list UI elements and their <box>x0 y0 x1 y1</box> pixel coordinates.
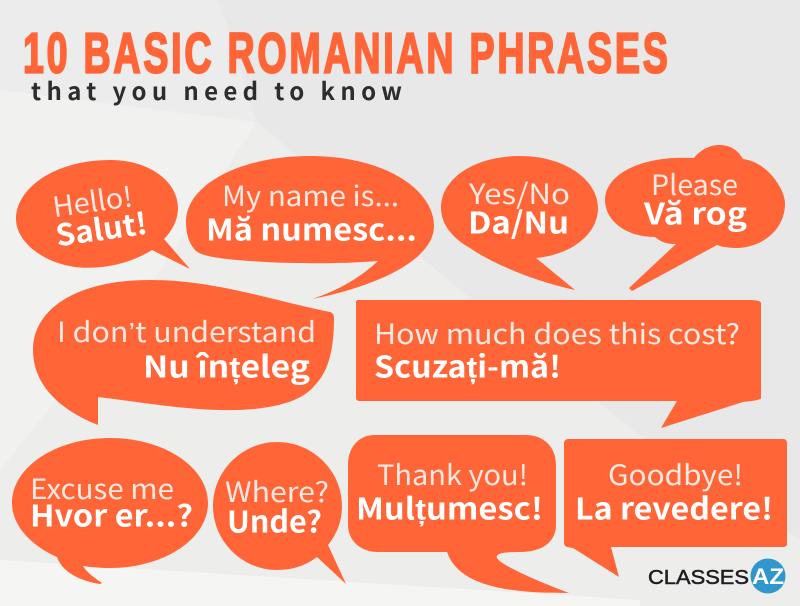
bubble: My name is <box>186 156 434 299</box>
bubble: Where: Unde? <box>227 498 322 542</box>
bubble: Where: Where? <box>225 471 329 511</box>
bubble: Yes/No: Da/Nu <box>468 198 569 242</box>
bubble: Thank you <box>348 435 569 593</box>
bubble: Goodbye <box>564 439 787 577</box>
bubble: Hello: Hello! <box>50 175 135 226</box>
bubble: Excuse me: Excuse me <box>30 468 174 508</box>
bubble: My name is: Mă numesc... <box>206 206 417 250</box>
bubble: I don't understand <box>33 280 334 425</box>
title: 10 BASIC ROMANIAN PHRASES <box>23 22 668 85</box>
bubble: How much does this cost: Scuzați-mă! <box>374 342 561 386</box>
bubble: I don't understand: I don’t understand <box>57 311 316 351</box>
subtitle: that you need to know <box>31 72 402 107</box>
bubble: Thank you: Thank you! <box>377 454 528 494</box>
bubble: Where <box>213 442 346 584</box>
logo: Classes AZ: AZ <box>752 564 784 589</box>
bubble: I don't understand: Nu înțeleg <box>143 342 310 386</box>
bubble: Please: Please <box>651 164 738 204</box>
bubble: Goodbye: Goodbye! <box>608 454 743 494</box>
bubble: Yes/No: Yes/No <box>468 173 570 213</box>
bubble: Hello <box>16 160 190 269</box>
bubble: Thank you: Mulțumesc! <box>356 484 543 528</box>
bubble: Excuse me <box>12 438 208 584</box>
bubble: Please <box>605 145 785 291</box>
bubble: Yes/No <box>441 156 598 290</box>
bubble: Excuse me: Hvor er...? <box>30 492 193 536</box>
bubble: Goodbye: La revedere! <box>575 484 773 528</box>
bubble: Please: Vă rog <box>643 190 747 234</box>
bubble: My name is: My name is... <box>222 175 399 215</box>
logo: Classes AZ <box>648 558 786 594</box>
bubble: Hello: Salut! <box>53 199 150 255</box>
bubble: How much does this cost <box>356 300 761 428</box>
logo: Classes AZ: CLASSES <box>648 567 749 589</box>
bubble: How much does this cost: How much does this cost? <box>374 313 740 353</box>
